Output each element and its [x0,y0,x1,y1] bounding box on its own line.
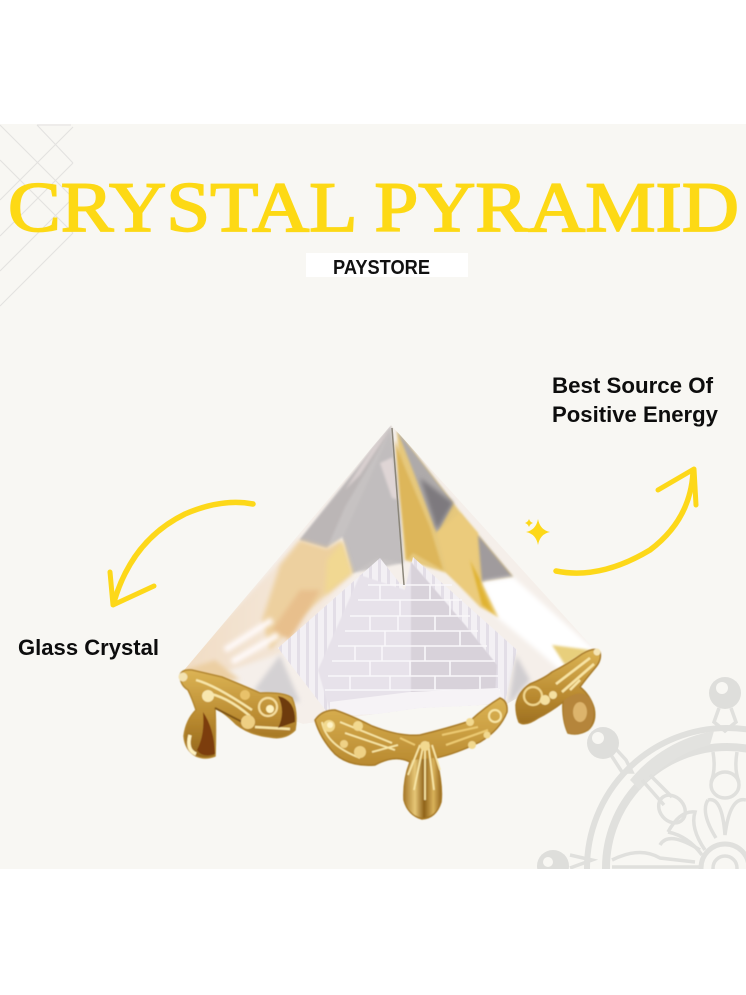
centre edge line [392,428,404,585]
right grey triangle [478,535,513,582]
left gold foot [178,670,296,758]
centre amber band [395,440,443,570]
grey upper left base [300,425,403,573]
decorative diamond lattice [0,125,73,306]
infographic canvas [0,124,746,869]
callout: glass crystal: Glass Crystal [18,635,159,660]
bright white facet [482,577,597,670]
white base strip [330,688,505,716]
brick faces [318,562,412,709]
inner stepped pyramid [278,557,517,716]
title: CRYSTAL PYRAMID [8,169,739,247]
crystal body [236,428,574,724]
sparkle icon [525,519,550,545]
ship wheel watermark [537,677,746,869]
right arrow [556,469,696,573]
right amber band [437,513,499,617]
callout: best source of positive energy [552,373,719,427]
crystal pyramid [175,425,597,724]
left grey facet [300,462,370,548]
central grey facet [343,501,404,563]
white streaks lower left [225,620,278,662]
left arrow [110,502,253,605]
callout: best source of positive energy: Positive Energy [552,402,719,427]
left amber band [262,540,352,650]
white mortar courses [325,585,500,690]
cream panel [0,124,746,869]
callout: best source of positive energy: Best Source Of [552,373,714,398]
lower corner shadows [254,655,300,702]
brand label [306,253,468,279]
centre gold foot [315,698,507,819]
right amber base [397,430,513,617]
brand label: PAYSTORE [333,257,430,279]
lower left peach zone [184,560,327,670]
right gold foot [516,648,600,734]
right dark grey facet [397,430,453,533]
